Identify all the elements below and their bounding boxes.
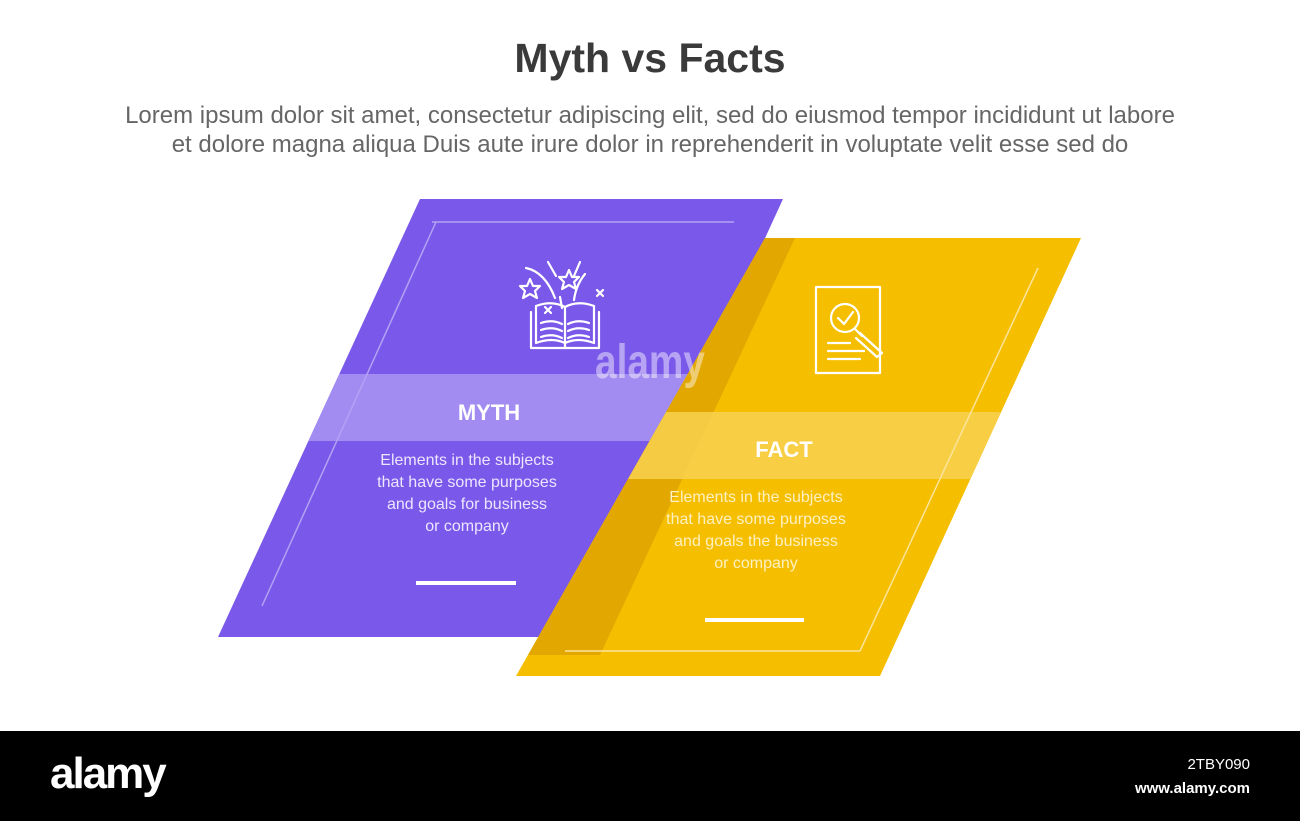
text: fact description: Elements in the subjects: [669, 489, 843, 506]
text: fact description: and goals the business: [674, 533, 838, 550]
footer id: 2TBY090: [1187, 756, 1250, 773]
footer id: www.alamy.com: [1135, 780, 1250, 797]
title: Myth vs Facts: [514, 35, 786, 81]
text: fact description: that have some purposes: [666, 511, 846, 528]
footer logo: alamy: [50, 749, 165, 798]
text: myth description: and goals for business: [387, 496, 547, 513]
icon: magic book: [520, 262, 603, 348]
subtitle: Lorem ipsum dolor sit amet, consectetur adipiscing elit, sed do eiusmod tempor incididunt ut labore: [125, 102, 1175, 129]
label: FACT: FACT: [755, 437, 813, 462]
label: MYTH: MYTH: [458, 400, 520, 425]
text: myth description: that have some purposes: [377, 474, 557, 491]
text: myth description: Elements in the subjects: [380, 452, 554, 469]
icon: document with magnifier: [816, 287, 882, 373]
text: fact description: or company: [714, 555, 798, 572]
panel: fact: [500, 238, 1100, 676]
comparison diagram: [218, 199, 1081, 676]
panel: myth: [200, 199, 800, 637]
subtitle: et dolore magna aliqua Duis aute irure dolor in reprehenderit in voluptate velit esse sed do: [172, 131, 1128, 158]
text: fact description: [666, 489, 846, 572]
text: myth description: [377, 452, 557, 535]
footer id: [1135, 756, 1250, 797]
footer bar: [0, 731, 1300, 821]
subtitle: [125, 102, 1175, 158]
text: myth description: or company: [425, 518, 509, 535]
watermark: alamy: [595, 336, 705, 389]
